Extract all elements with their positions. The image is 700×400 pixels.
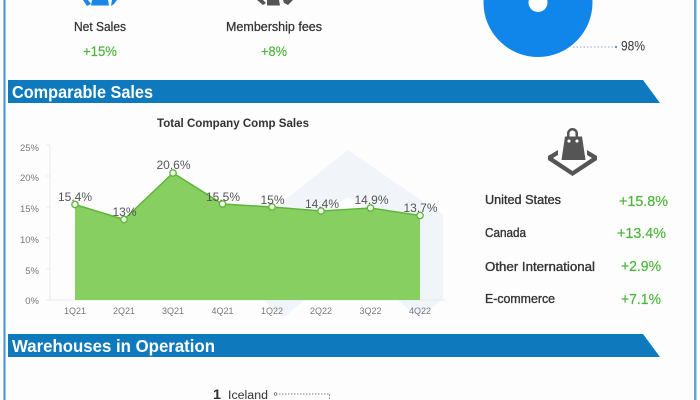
icon: shopping bag on tray	[548, 128, 597, 176]
area chart	[20, 143, 445, 316]
area fill	[75, 173, 420, 300]
row: e-commerce: +7.1%	[621, 292, 661, 308]
row: united states: United States	[485, 193, 561, 207]
callout: 98%	[573, 38, 645, 54]
data labels: 20.6%	[156, 158, 191, 172]
data labels: 14.9%	[354, 193, 389, 207]
row: canada: Canada	[485, 226, 526, 240]
x axis labels: 1Q21	[64, 306, 86, 316]
x axis labels: 4Q21	[211, 306, 234, 316]
donut chart	[484, 0, 592, 57]
row: canada	[485, 226, 666, 242]
value: net sales: +15%	[83, 43, 117, 59]
row: other international	[485, 259, 661, 275]
heading band: comparable sales	[8, 80, 660, 103]
y axis labels: 10%	[20, 235, 40, 246]
label: membership fees: Membership fees	[226, 20, 322, 34]
row: e-commerce	[485, 292, 661, 308]
data labels: 15%	[260, 193, 285, 207]
x axis labels: 3Q22	[359, 306, 382, 316]
label: net sales: Net Sales	[74, 20, 126, 34]
data labels: 13%	[112, 205, 137, 219]
y axis labels: 20%	[20, 173, 40, 184]
row: canada: +13.4%	[617, 226, 666, 242]
list: regional comp sales	[485, 193, 668, 308]
data labels: 15.4%	[58, 190, 92, 204]
x axis labels	[64, 306, 431, 316]
icon: net sales	[83, 0, 117, 6]
panel: top metrics	[74, 0, 645, 59]
y axis labels: 15%	[20, 204, 40, 215]
row: other international: Other International	[485, 260, 595, 274]
x axis labels: 3Q21	[162, 306, 184, 316]
y axis labels: 0%	[25, 296, 40, 307]
heading band: warehouses in operation	[8, 334, 660, 357]
watermark	[262, 150, 443, 318]
data labels	[58, 158, 438, 219]
y axis labels: 5%	[25, 266, 40, 277]
icon: membership fees	[257, 0, 293, 6]
heading band: comparable sales: Comparable Sales	[12, 82, 153, 102]
markers	[72, 170, 423, 223]
y axis labels: 25%	[20, 143, 40, 154]
data labels: 13.7%	[403, 201, 438, 215]
chart title: Total Company Comp Sales	[157, 116, 309, 130]
x axis labels: 2Q21	[113, 306, 135, 316]
x axis labels: 2Q22	[310, 306, 332, 316]
row: united states: +15.8%	[619, 194, 668, 210]
row: united states	[485, 193, 668, 210]
heading band: warehouses in operation: Warehouses in Operation	[12, 336, 215, 356]
data labels: 15.5%	[206, 190, 240, 204]
x axis labels: 1Q22	[261, 306, 283, 316]
data labels: 14.4%	[305, 197, 339, 211]
row: other international: +2.9%	[621, 259, 661, 275]
value: membership fees: +8%	[261, 43, 287, 59]
y axis labels	[20, 143, 40, 307]
line	[75, 173, 420, 220]
callout: iceland	[213, 386, 330, 400]
callout: 98%: 98%	[621, 38, 645, 54]
x axis labels: 4Q22	[409, 306, 431, 316]
row: e-commerce: E-commerce	[485, 292, 555, 306]
